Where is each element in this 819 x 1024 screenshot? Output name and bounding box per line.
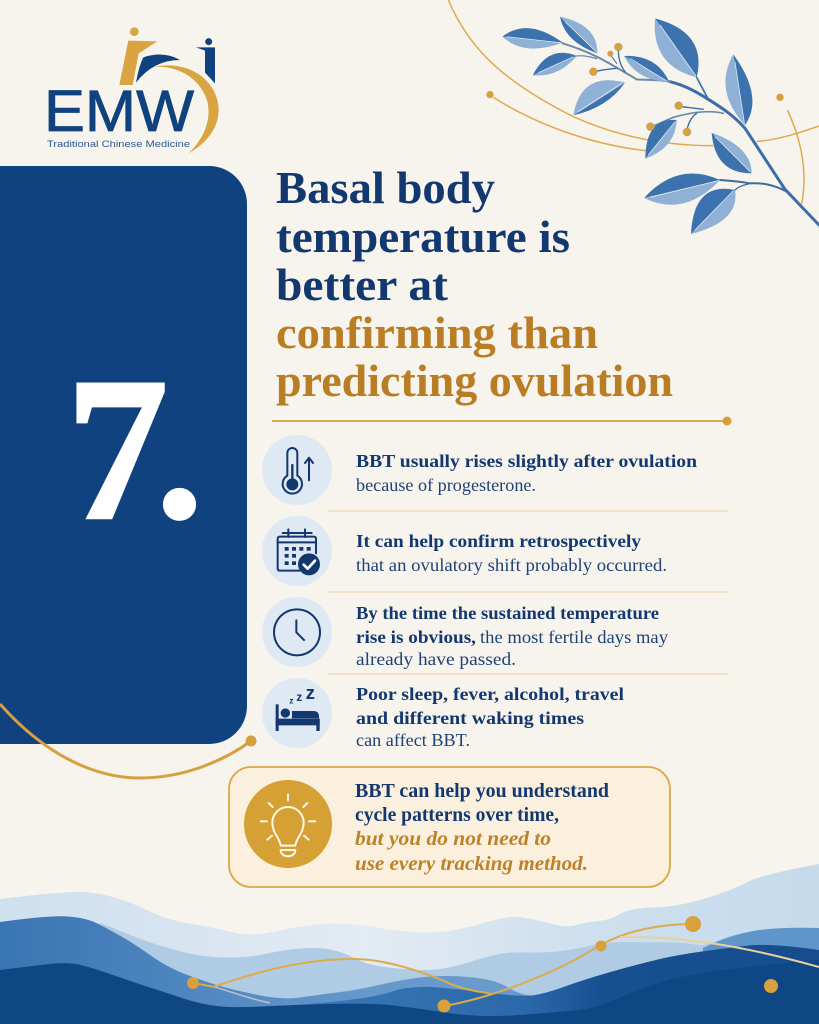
text: and different waking times	[356, 708, 584, 728]
title: predicting ovulation	[276, 355, 673, 406]
title	[276, 162, 673, 406]
icon: bed with zzz: z	[306, 682, 315, 703]
icon: bed with zzz: z	[289, 696, 293, 705]
callout	[229, 767, 670, 887]
number: 7	[66, 336, 168, 563]
text: already have passed.	[356, 649, 516, 669]
decorative branch with leaves and berries	[448, 0, 819, 234]
icon: calendar with check	[262, 516, 332, 586]
text: can affect BBT.	[356, 730, 470, 750]
text	[356, 603, 668, 669]
text: that an ovulatory shift probably occurred.	[356, 555, 667, 575]
title: better at	[276, 259, 449, 310]
icon: thermometer with up arrow	[262, 435, 332, 505]
gold arc with end dot	[0, 704, 256, 778]
text	[356, 531, 667, 575]
number: .	[154, 337, 205, 563]
callout text: cycle patterns over time,	[355, 805, 559, 826]
list row 1: thermometer	[262, 435, 697, 505]
icon: bed with zzz: z	[296, 691, 302, 704]
title: Basal body	[276, 162, 495, 213]
text	[356, 684, 624, 750]
title: temperature is	[276, 211, 570, 262]
logo: EMW Traditional Chinese Medicine	[44, 27, 219, 153]
callout text	[355, 781, 609, 875]
text: Poor sleep, fever, alcohol, travel	[356, 684, 624, 704]
text: It can help confirm retrospectively	[356, 531, 641, 551]
logo: EMW Traditional Chinese Medicine: EMW	[44, 79, 194, 144]
text: rise is obvious,	[356, 627, 476, 647]
list row 3: clock	[262, 597, 668, 669]
bottom watercolor waves	[0, 864, 819, 1024]
list row 2: calendar	[262, 516, 667, 586]
text: because of progesterone.	[356, 475, 536, 495]
text: By the time the sustained temperature	[356, 603, 659, 623]
title: confirming than	[276, 307, 598, 358]
icon: clock	[262, 597, 332, 667]
text: BBT usually rises slightly after ovulation	[356, 451, 697, 471]
logo: EMW Traditional Chinese Medicine: Traditional Chinese Medicine	[47, 139, 190, 150]
callout text: use every tracking method.	[355, 854, 588, 875]
icon: light bulb	[244, 780, 332, 868]
text: the most fertile days may	[480, 627, 668, 647]
callout text: but you do not need to	[355, 829, 551, 850]
icon: bed with zzz	[262, 678, 332, 748]
title rule with dot	[272, 416, 732, 426]
callout text: BBT can help you understand	[355, 781, 609, 802]
panel: number 7	[0, 166, 247, 744]
text	[356, 451, 697, 495]
list row 4: sleep	[262, 678, 624, 750]
